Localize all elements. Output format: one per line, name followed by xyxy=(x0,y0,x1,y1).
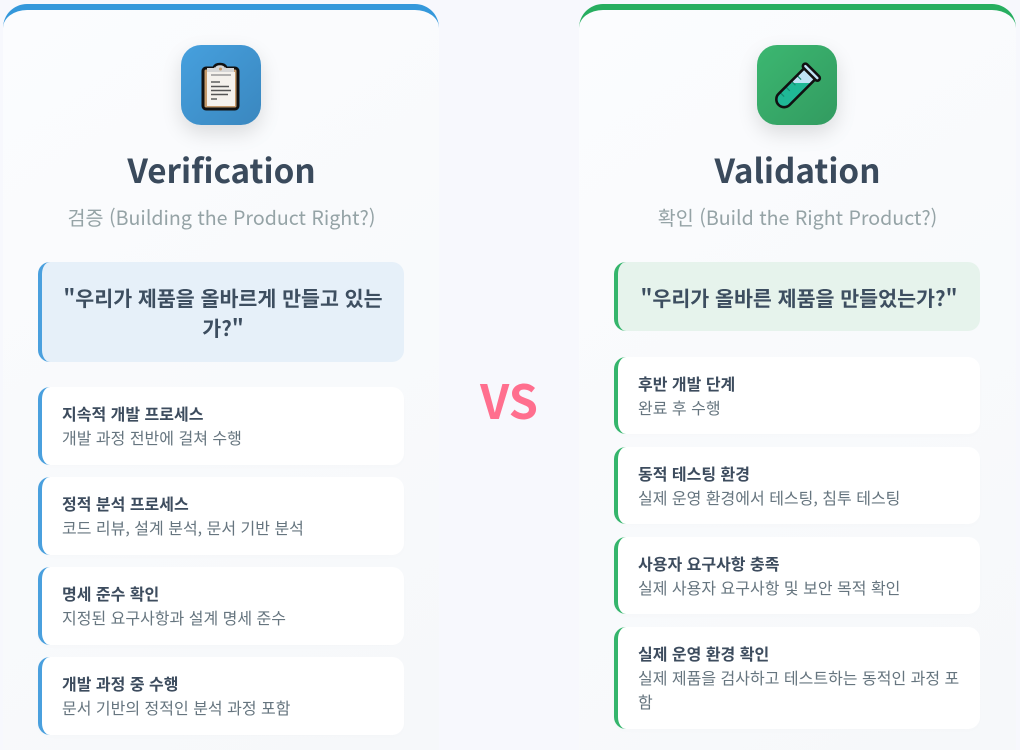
subtitle: validation: 확인 (Build the Right Product?) xyxy=(658,202,937,231)
item: continuous development xyxy=(38,387,404,465)
VS label: VS xyxy=(480,364,538,433)
item: user requirements: 사용자 요구사항 충족 xyxy=(638,551,779,575)
item: specification compliance: 명세 준수 확인 xyxy=(62,581,159,605)
callout: validation question xyxy=(614,262,980,331)
icon: clipboard xyxy=(181,45,261,125)
item: dynamic testing: 동적 테스팅 환경 xyxy=(638,461,750,485)
item: late development stage: 후반 개발 단계 xyxy=(638,371,735,395)
heading: Validation: Validation xyxy=(714,144,880,193)
item: real environment: 실제 제품을 검사하고 테스트하는 동적인 과정 포함 xyxy=(638,665,959,713)
panel: validation xyxy=(579,4,1016,750)
item: late development stage: 완료 후 수행 xyxy=(638,395,721,419)
item: specification compliance xyxy=(38,567,404,645)
subtitle: verification: 검증 (Building the Product Right?) xyxy=(68,202,375,231)
item: static analysis: 정적 분석 프로세스 xyxy=(62,491,189,515)
item: user requirements: 실제 사용자 요구사항 및 보안 목적 확인 xyxy=(638,575,900,599)
item: late development stage xyxy=(614,357,980,434)
item: real environment: 실제 운영 환경 확인 xyxy=(638,641,769,665)
callout: verification question: "우리가 제품을 올바르게 만들고 있는 가?" xyxy=(63,282,383,342)
item: during development: 개발 과정 중 수행 xyxy=(62,671,178,695)
item: during development: 문서 기반의 정적인 분석 과정 포함 xyxy=(62,695,290,719)
item: dynamic testing: 실제 운영 환경에서 테스팅, 침투 테스팅 xyxy=(638,485,900,509)
item: user requirements xyxy=(614,537,980,614)
item: dynamic testing xyxy=(614,447,980,524)
heading: Verification: Verification xyxy=(127,144,316,193)
item: continuous development: 개발 과정 전반에 걸쳐 수행 xyxy=(62,425,242,449)
item: real environment xyxy=(614,627,980,729)
callout: validation question: "우리가 올바른 제품을 만들었는가?" xyxy=(641,282,957,312)
item: static analysis: 코드 리뷰, 설계 분석, 문서 기반 분석 xyxy=(62,515,304,539)
item: continuous development: 지속적 개발 프로세스 xyxy=(62,401,203,425)
icon: test tube xyxy=(757,44,837,124)
item: specification compliance: 지정된 요구사항과 설계 명세 준수 xyxy=(62,605,286,629)
panel: verification xyxy=(3,4,439,750)
item: during development xyxy=(38,657,404,735)
item: static analysis xyxy=(38,477,404,555)
callout: verification question xyxy=(38,262,404,362)
